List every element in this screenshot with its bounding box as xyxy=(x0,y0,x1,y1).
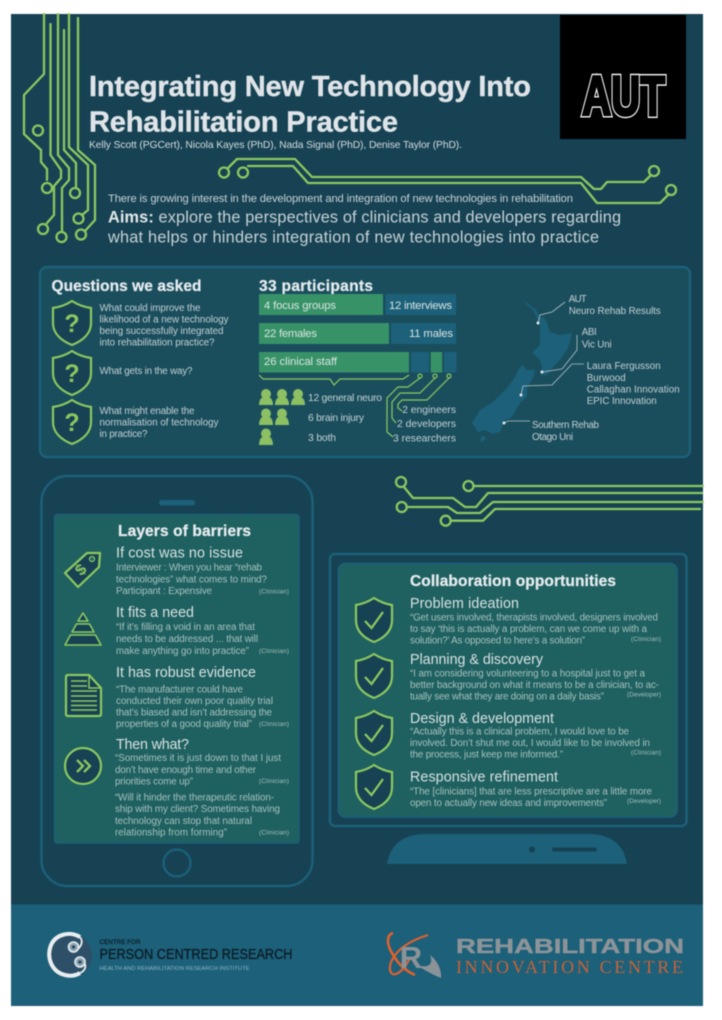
map labels: Otago Uni xyxy=(532,432,573,443)
circuit: top middle xyxy=(219,159,676,203)
map labels: AUT xyxy=(569,294,587,305)
icon: pyramid xyxy=(65,613,101,645)
bar: females and males: 11 males xyxy=(409,328,453,340)
map labels: Neuro Rehab Results xyxy=(569,306,661,317)
icon: orbit and R: R xyxy=(400,940,422,975)
bar: focus groups and interviews xyxy=(259,294,456,315)
barrier: fits a need: “If it’s filling a void in an area that xyxy=(116,622,255,633)
title: Integrating New Technology Into xyxy=(89,71,531,103)
barrier: then what: Then what? xyxy=(116,737,189,753)
opportunity: design and development: Design & development xyxy=(410,711,554,727)
map connectors xyxy=(502,302,584,424)
monitor stand xyxy=(387,834,627,864)
text: non-clinical roles: 2 developers xyxy=(397,419,456,430)
opportunity: problem ideation xyxy=(410,596,661,646)
barrier: evidence: It has robust evidence xyxy=(116,665,256,681)
opportunity: planning and discovery: Planning & discovery xyxy=(410,652,544,668)
text: clinical specialities: 6 brain injury xyxy=(308,413,365,424)
icon: price tag xyxy=(65,553,100,587)
barrier: then what: ship with my client? Sometimes having xyxy=(115,804,280,815)
heading: collaboration opportunities: Collaboration opportunities xyxy=(410,573,616,590)
opportunity: design and development: “Actually this is a clinical problem, I would love to be xyxy=(410,726,630,738)
icons: people row 2 xyxy=(259,408,289,425)
opportunity: problem ideation: “Get users involved, therapists involved, designers involved xyxy=(410,613,658,624)
heading: 33 participants: 33 participants xyxy=(259,278,373,295)
text: clinical specialities: 3 both xyxy=(308,433,336,444)
barrier: evidence: properties of a good quality trial” xyxy=(116,719,252,730)
opportunity: problem ideation: solution?’ As opposed to here’s a solution” xyxy=(410,636,585,646)
barrier: evidence: “The manufacturer could have xyxy=(116,685,244,696)
opportunity: responsive refinement xyxy=(410,770,661,809)
barrier: cost: Participant : Expensive xyxy=(116,586,213,597)
map labels: Laura Fergusson xyxy=(587,361,661,372)
tablet home button xyxy=(164,850,190,876)
barrier: then what: “Sometimes it is just down to that I just xyxy=(115,753,281,764)
map labels xyxy=(532,294,680,443)
bracket: clinical staff xyxy=(259,375,409,385)
opportunity: responsive refinement: (Developer) xyxy=(627,798,661,805)
text: centre name: HEALTH AND REHABILITATION RESEARCH INSTITUTE xyxy=(100,966,250,972)
barrier: then what: priorities come up” xyxy=(115,776,193,788)
barrier: evidence xyxy=(116,665,289,730)
bar: focus groups and interviews: 4 focus groups xyxy=(264,300,336,312)
panel: tablet with layers of barriers xyxy=(42,476,312,886)
barrier: then what: relationship from forming” xyxy=(115,828,227,838)
monitor screen xyxy=(338,564,677,817)
map labels: Callaghan Innovation xyxy=(587,384,680,396)
icon: check shield 2 xyxy=(356,654,392,698)
heading: layers of barriers: Layers of barriers xyxy=(118,523,251,540)
introduction and aims: what helps or hinders integration of new technologies into practice xyxy=(107,228,599,246)
monitor frame xyxy=(330,554,686,826)
introduction and aims xyxy=(107,193,621,246)
circuit: top left xyxy=(24,14,95,242)
bar: females and males: 22 females xyxy=(264,328,317,340)
map labels: Southern Rehab xyxy=(532,420,600,431)
barrier: evidence: conducted their own poor quality trial xyxy=(116,696,273,707)
barrier: cost: technologies” what comes to mind? xyxy=(116,574,268,586)
text: question 3: in practice? xyxy=(100,429,148,440)
circuit: right middle xyxy=(396,477,703,526)
map: New Zealand xyxy=(472,300,572,442)
text: question 3: What might enable the xyxy=(100,406,195,417)
opportunity: problem ideation: (Clinician) xyxy=(631,636,661,643)
text: rehabilitation: REHABILITATION xyxy=(456,936,684,958)
text: centre name xyxy=(100,939,292,972)
barrier: fits a need: It fits a need xyxy=(116,605,194,621)
text: question 3: normalisation of technology xyxy=(100,418,219,428)
text: question 2: What gets in the way? xyxy=(100,366,193,377)
map labels: Burwood xyxy=(587,373,626,384)
text: non-clinical roles: 2 engineers xyxy=(402,405,456,416)
opportunity: planning and discovery: “I am considering volunteering to a hospital just to get a xyxy=(410,669,646,680)
barrier: cost: Interviewer : When you hear “rehab xyxy=(116,563,263,574)
panel: monitor with collaboration opportunities xyxy=(330,554,686,864)
tablet speaker xyxy=(159,500,195,506)
icon: question shield 2: ? xyxy=(64,360,80,388)
icon: question shield 3 xyxy=(53,400,91,444)
title: Rehabilitation Practice xyxy=(89,106,398,138)
icon: check shield 1 xyxy=(356,598,392,642)
barrier: then what: (Clinician) xyxy=(259,778,289,785)
icons: people row 1 xyxy=(259,389,305,405)
opportunity: planning and discovery: tually see what they are doing on a daily basis” xyxy=(410,692,604,702)
text: innovation centre: INNOVATION CENTRE xyxy=(456,957,683,977)
logo: AUT: AUT xyxy=(582,64,665,127)
bar: staff breakdown xyxy=(259,352,456,372)
opportunity: responsive refinement: “The [clinicians] that are less prescriptive are a little more xyxy=(410,786,653,798)
logo: AUT: AUT xyxy=(582,64,665,127)
opportunity: planning and discovery xyxy=(410,652,661,702)
barrier: fits a need xyxy=(116,605,289,657)
map labels: ABI xyxy=(582,327,597,338)
icon: question shield 2 xyxy=(53,351,91,395)
icon: check shield 4 xyxy=(356,765,392,809)
introduction and aims: There is growing interest in the development and integration of new technologies in rehabilitation xyxy=(108,193,573,205)
icon: question shield 1: ? xyxy=(64,310,80,338)
icon: question shield 1 xyxy=(53,301,91,345)
barrier: fits a need: needs to be addressed ... that will xyxy=(116,634,258,645)
icon: question shield 3: ? xyxy=(64,409,80,437)
opportunity: responsive refinement: open to actually new ideas and improvements” xyxy=(410,798,607,809)
opportunity: design and development: the process, just keep me informed.” xyxy=(410,750,563,760)
introduction and aims: Aims: explore the perspectives of clinicians and developers regarding xyxy=(108,208,621,226)
icon: people row 3 xyxy=(259,428,273,445)
text: question 1: likelihood of a new technology xyxy=(100,314,229,326)
barrier: then what: “Will it hinder the therapeutic relation- xyxy=(115,793,274,804)
icon: price tag: $ xyxy=(72,561,91,580)
bar: staff breakdown: 26 clinical staff xyxy=(264,356,338,368)
monitor stand details xyxy=(529,846,597,852)
opportunity: responsive refinement: Responsive refinement xyxy=(410,770,558,786)
bar: focus groups and interviews: 12 interviews xyxy=(389,300,452,312)
map labels: Vic Uni xyxy=(582,340,612,350)
barrier: cost: (Clinician) xyxy=(259,588,289,596)
icon: orbit and R xyxy=(388,933,441,978)
map labels: EPIC Innovation xyxy=(587,396,657,407)
barrier: evidence: (Clinician) xyxy=(259,721,289,728)
text: centre name: CENTRE FOR xyxy=(100,939,141,946)
connectors: non-clinical roles xyxy=(387,374,451,437)
icon: document xyxy=(66,675,101,716)
opportunity: planning and discovery: (Developer) xyxy=(627,692,661,698)
text: clinical specialities: 12 general neuro xyxy=(308,393,382,404)
text: clinical specialities xyxy=(308,393,382,444)
icon: check shield 3 xyxy=(356,711,392,755)
barrier: then what: technology can stop that natural xyxy=(115,816,252,827)
logo: Rehabilitation Innovation Centre xyxy=(388,933,684,978)
footer band xyxy=(11,904,703,1006)
opportunity: design and development: (Clinician) xyxy=(631,750,661,756)
icon: double chevron xyxy=(65,748,101,784)
opportunity: problem ideation: Problem ideation xyxy=(410,596,519,612)
logo: AUT xyxy=(560,15,686,139)
tablet screen xyxy=(54,514,299,843)
tablet frame xyxy=(42,476,312,886)
opportunity: design and development: involved. Don’t shut me out, I would like to be involved in xyxy=(410,738,650,749)
barrier: evidence: that’s biased and isn’t addressing the xyxy=(116,708,273,718)
barrier: fits a need: (Clinician) xyxy=(259,648,289,655)
text: question 1: being successfully integrated xyxy=(100,326,224,337)
barrier: cost xyxy=(116,546,289,597)
text: non-clinical roles xyxy=(393,405,456,444)
text: question 1: into rehabilitation practice? xyxy=(100,338,215,348)
opportunity: problem ideation: to say ‘this is actually a problem, can we come up with a xyxy=(410,624,648,635)
icon: koru spiral xyxy=(47,933,92,978)
logo: Centre for Person Centred Research xyxy=(47,933,292,978)
heading: questions we asked: Questions we asked xyxy=(52,278,202,295)
bar: females and males xyxy=(259,323,456,344)
barrier: then what: (Clinician) xyxy=(259,830,289,836)
authors: Kelly Scott (PGCert), Nicola Kayes (PhD), Nada Signal (PhD), Denise Taylor (PhD). xyxy=(89,140,462,151)
barrier: cost: If cost was no issue xyxy=(116,546,243,562)
barrier: fits a need: make anything go into practice” xyxy=(116,646,249,657)
opportunity: planning and discovery: better background on what it means to be a clinician, to ac- xyxy=(410,680,659,691)
text: non-clinical roles: 3 researchers xyxy=(393,434,456,444)
barrier: then what xyxy=(115,737,289,838)
text: centre name: PERSON CENTRED RESEARCH xyxy=(100,946,292,963)
panel: questions and participants xyxy=(40,267,690,457)
barrier: then what: don’t have enough time and other xyxy=(115,765,257,776)
opportunity: design and development xyxy=(410,711,661,760)
text: question 3 xyxy=(100,406,219,440)
text: question 1: What could improve the xyxy=(100,303,201,314)
text: question 1 xyxy=(100,303,229,348)
title xyxy=(89,71,531,138)
